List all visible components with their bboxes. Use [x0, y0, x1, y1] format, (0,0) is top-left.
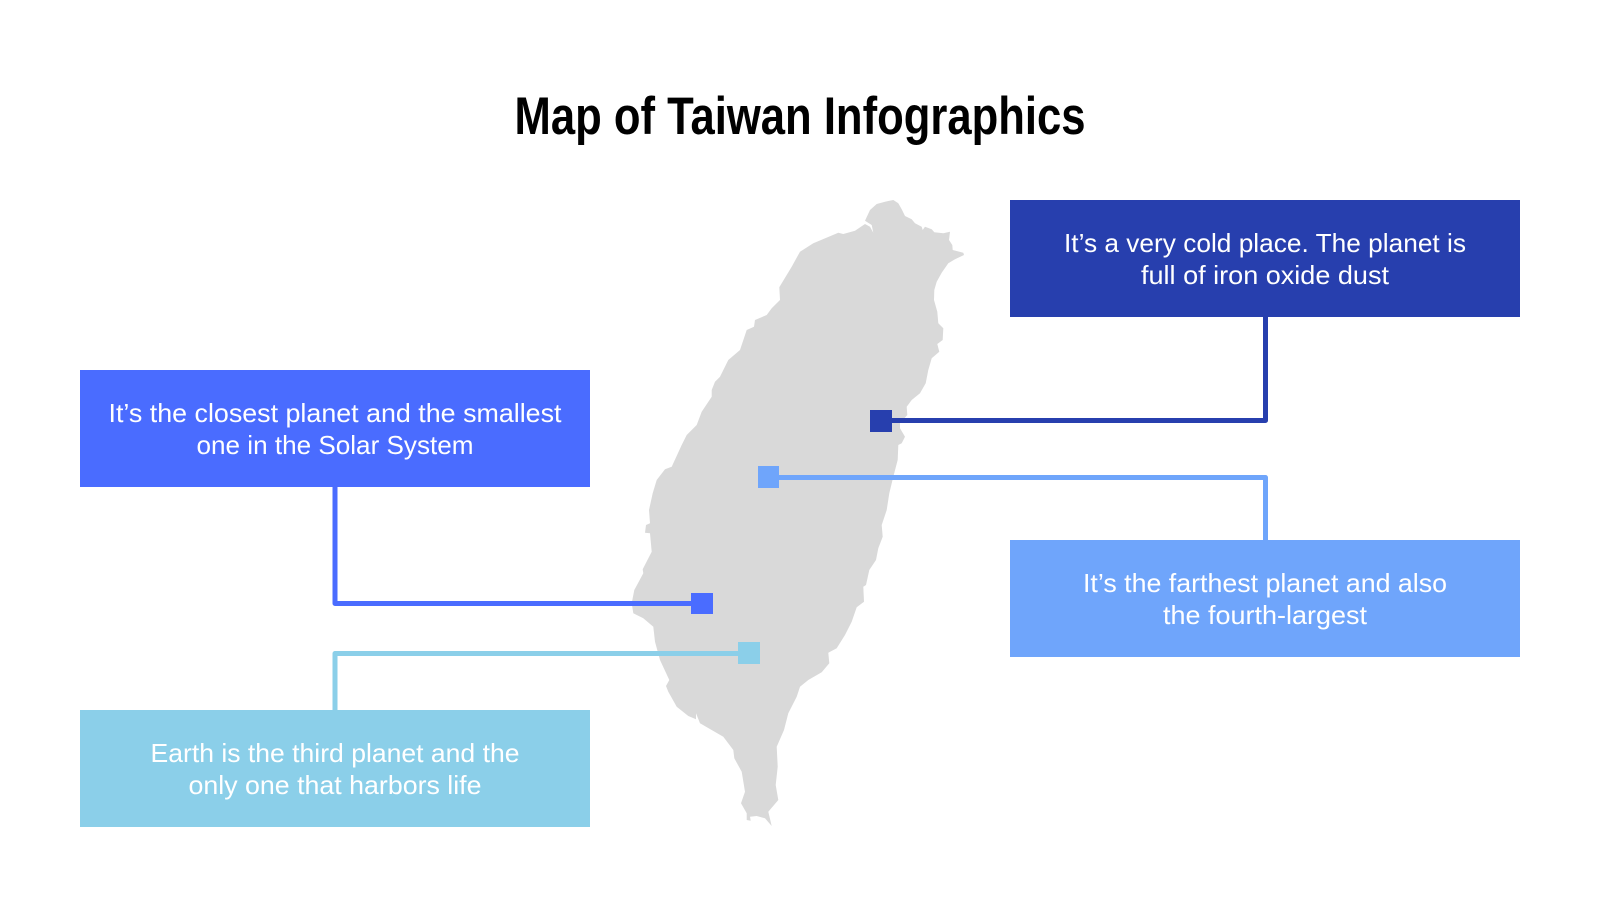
marker: light blue: [758, 466, 779, 488]
connector: light blue: [770, 478, 1266, 540]
panel: closest planet: one in the Solar System: [196, 430, 474, 460]
panel: farthest planet: the fourth-largest: [1163, 600, 1368, 630]
panel: third planet: only one that harbors life: [188, 770, 482, 800]
marker: dark blue: [870, 410, 892, 432]
connector: blue: [335, 487, 700, 604]
connector: cyan: [335, 654, 750, 710]
connector: dark blue: [880, 317, 1266, 420]
map: Taiwan silhouette: [632, 200, 964, 826]
marker: cyan: [738, 642, 760, 664]
panel: farthest planet: [1010, 540, 1520, 657]
panel: third planet: [80, 710, 590, 827]
title: Map of Taiwan Infographics: [514, 87, 1086, 146]
panel: cold place: It’s a very cold place. The planet is: [1064, 228, 1466, 258]
panel: closest planet: It’s the closest planet and the smallest: [108, 398, 562, 428]
panel: cold place: [1010, 200, 1520, 317]
marker: blue: [691, 593, 713, 614]
panel: farthest planet: It’s the farthest planet and also: [1083, 568, 1447, 598]
panel: third planet: Earth is the third planet and the: [150, 738, 520, 768]
panel: closest planet: [80, 370, 590, 487]
panel: cold place: full of iron oxide dust: [1141, 260, 1390, 290]
